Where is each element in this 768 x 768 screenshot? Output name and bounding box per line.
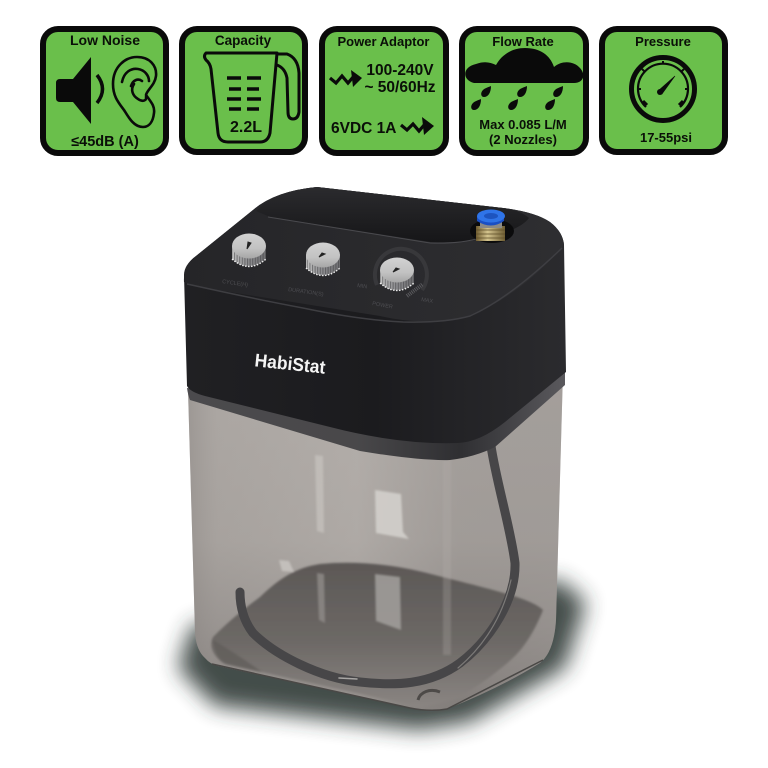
window reflection lower [375,574,401,630]
badge: flow rate [462,29,586,153]
black lid [184,187,566,443]
floor shadow [178,580,586,730]
icon: water drops [471,86,563,110]
upright sheen [443,460,451,655]
knob labels: CYCLE(H) [222,279,248,289]
icon: cloud [465,48,583,83]
lid top surface [184,187,564,321]
badge: power adaptor [322,29,446,153]
value: 45 dB: ≤45dB (A) [71,134,139,150]
icon: input arrow [330,70,362,87]
fitting socket [470,219,514,243]
knob labels: POWER [372,301,393,311]
value: 2.2 litres: 2.2L [230,119,262,136]
icon: ear [113,57,156,127]
base edge [212,660,543,710]
tray highlight [268,217,480,243]
badge: capacity [182,29,305,152]
knob 2 [306,242,340,276]
icon: measuring jug [204,53,299,142]
text: output voltage: 6VDC 1A [331,120,396,137]
text: max flow: Max 0.085 L/M [479,117,567,132]
heading: power adaptor: Power Adaptor [338,34,429,49]
brass fitting [476,220,505,241]
knob labels: DURATION(S) [288,287,324,298]
reservoir tank [188,372,563,710]
base ring detail [418,690,440,700]
knob labels [222,279,434,311]
text: input voltage: 100-240V [366,62,434,79]
badge: low noise [43,29,166,153]
knob 3 [375,249,427,296]
heading: low noise: Low Noise [70,32,140,48]
tank floor [211,563,543,707]
text: frequency: ~ 50/60Hz [364,79,436,96]
floor rim shading [213,640,262,672]
corner highlight [279,560,294,572]
lid highlight [187,248,562,322]
dark band [187,368,565,460]
vertical reflection lower [317,573,325,623]
value: pressure range: 17-55psi [640,130,692,145]
heading: capacity: Capacity [215,33,272,48]
icon: output arrow [401,117,434,135]
icon: speaker [56,57,102,124]
vertical reflection upper [315,455,324,533]
knob labels: MAX [421,297,434,305]
recessed tray [256,187,529,242]
badge: pressure [602,29,725,152]
knob 1 [232,234,266,266]
blue push connector [477,210,505,226]
heading: flow rate: Flow Rate [492,34,554,49]
window reflection upper [375,490,409,539]
icon: gauge [632,58,694,120]
brand logo: HabiStat [254,349,326,378]
product: misting pump [178,187,586,730]
dip tube [240,446,515,684]
text: nozzles: (2 Nozzles) [489,132,557,147]
knob labels: MIN [357,283,368,290]
heading: pressure: Pressure [635,34,691,49]
